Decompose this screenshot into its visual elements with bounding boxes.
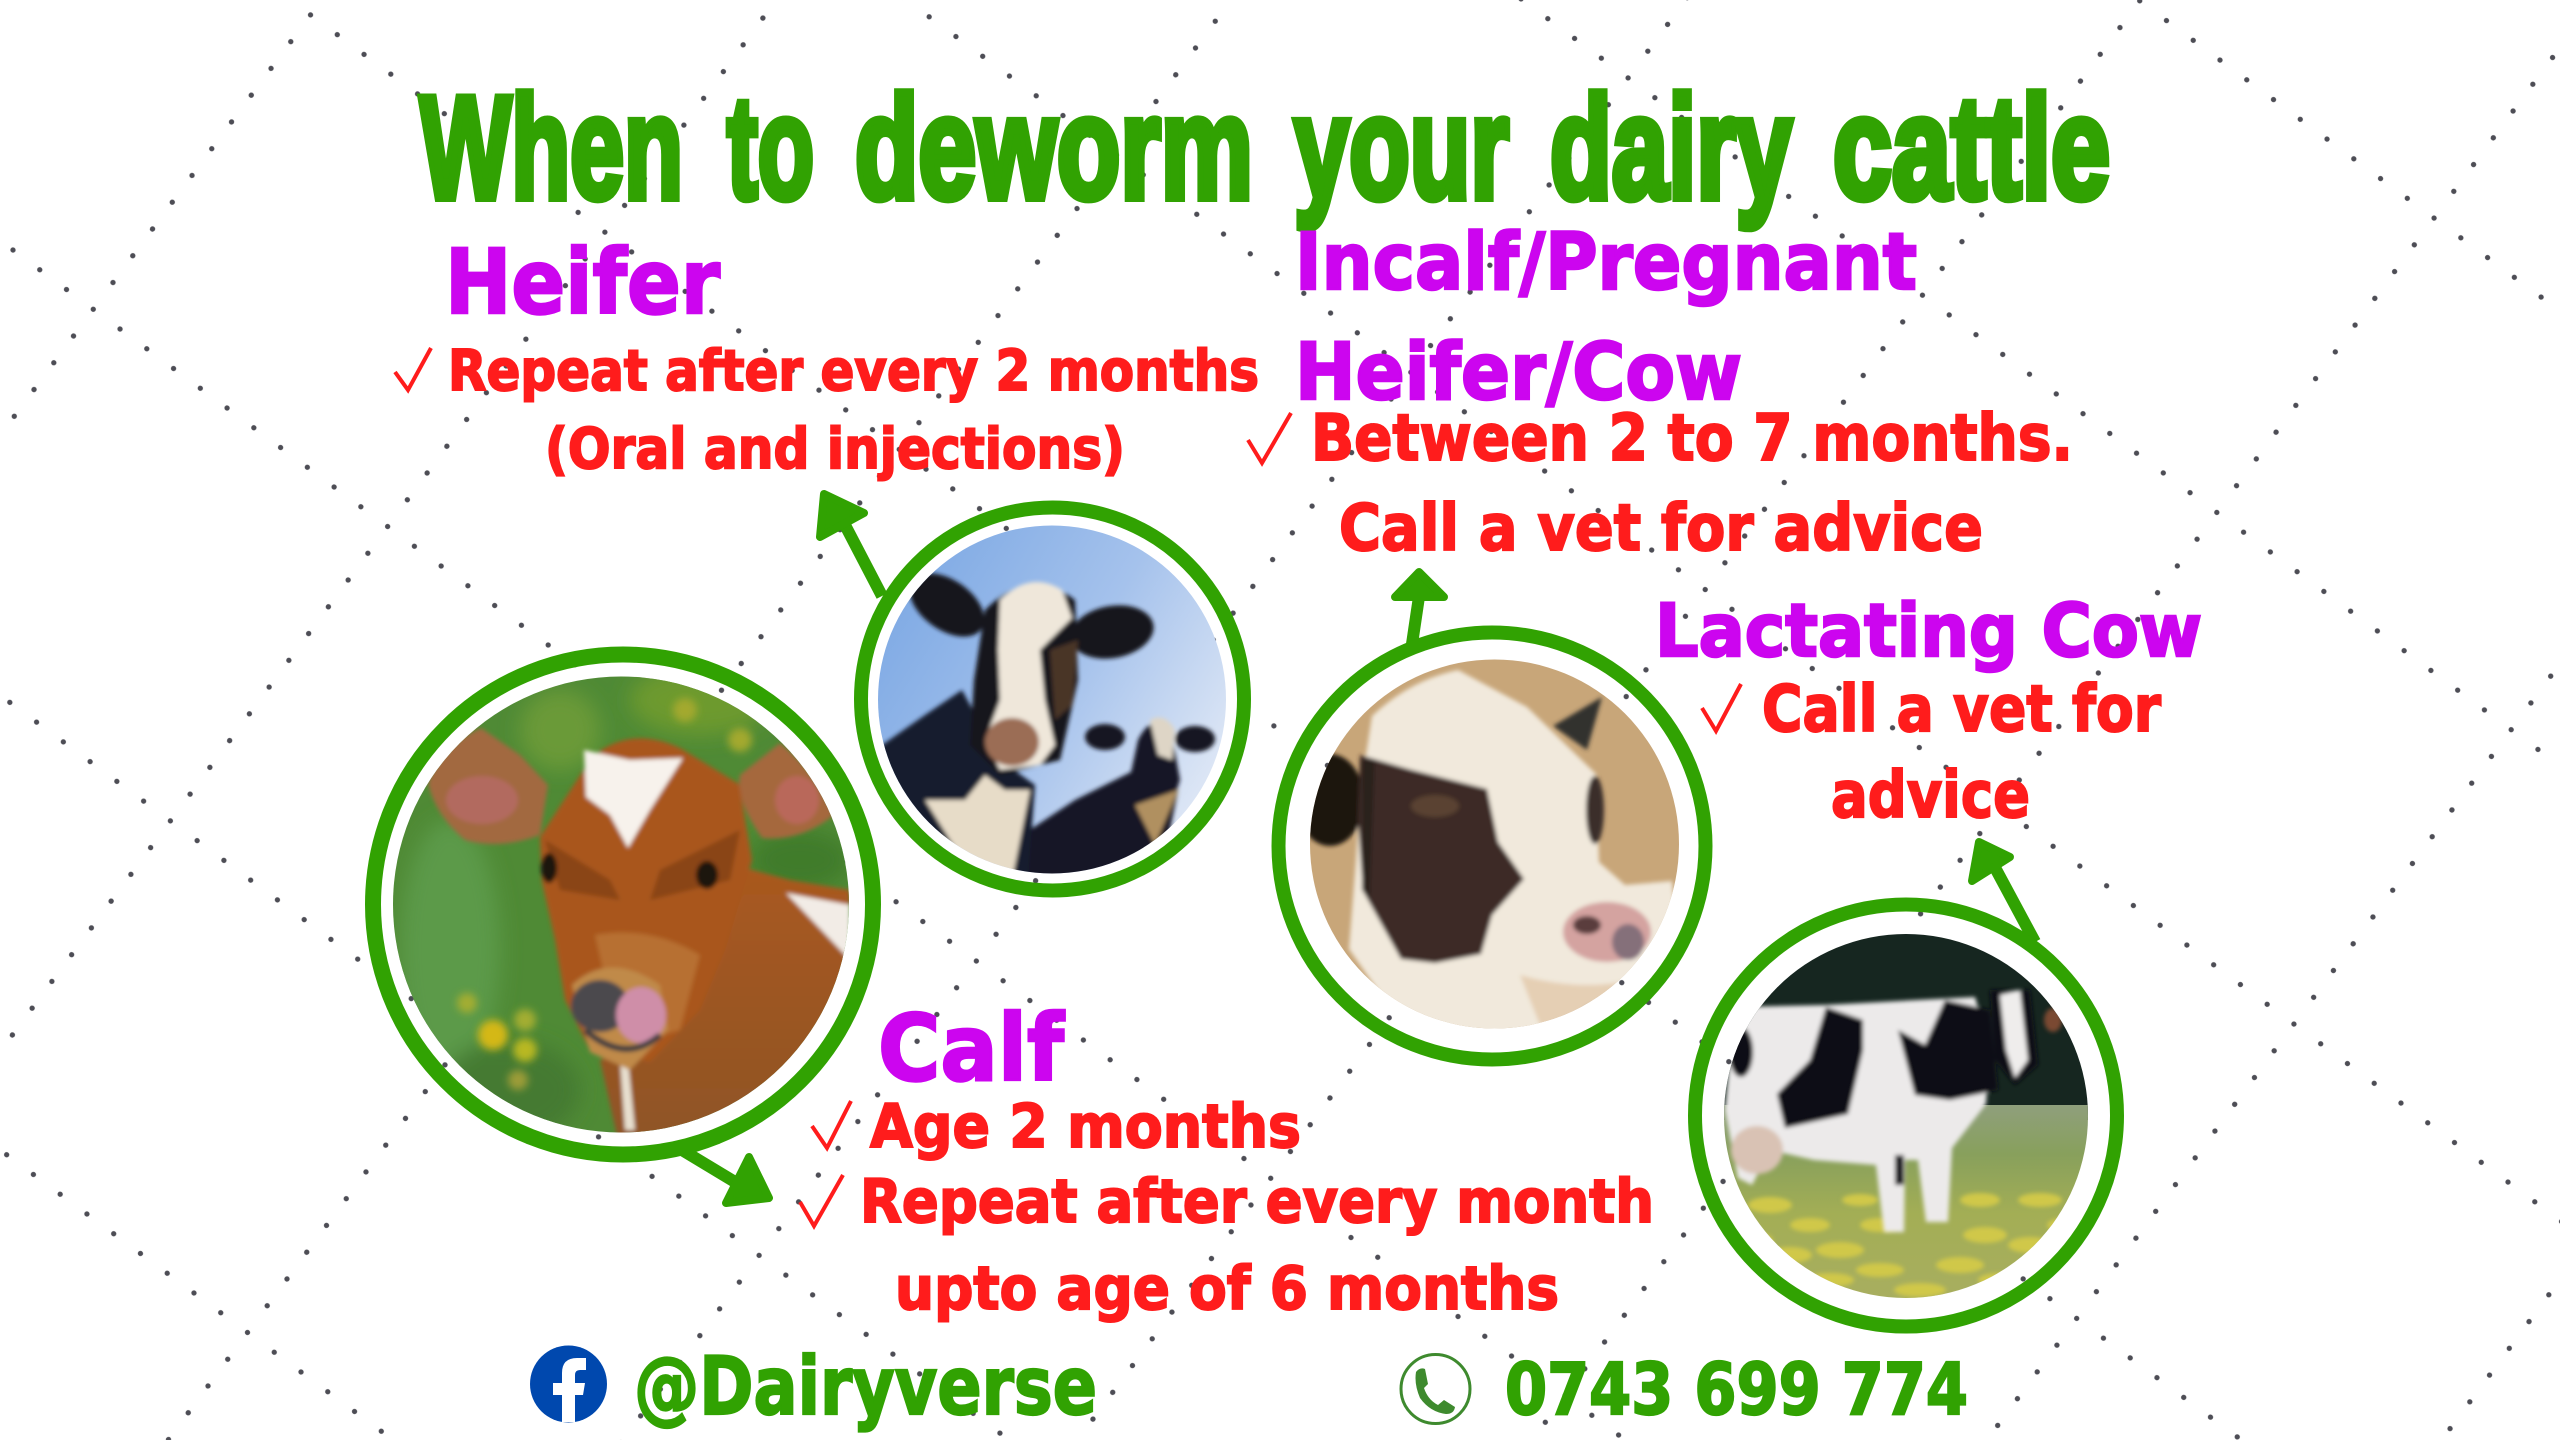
title: [420, 66, 2110, 229]
title: to: [727, 66, 814, 229]
heading: Heifer: Heifer: [445, 230, 720, 334]
head: [970, 585, 1078, 775]
text: call a vet for advice: Call a vet for advice: [1339, 492, 1983, 566]
icon: check mark: [1248, 413, 1291, 463]
text: upto age of 6 months: upto age of 6 months: [895, 1254, 1559, 1324]
arrow: lactating cow: [1972, 842, 2035, 942]
panel: lactating cow text: [1655, 589, 2202, 833]
text: between 2 to 7 months: Between 2 to 7 months.: [1311, 402, 2073, 476]
arrow: incalf: [1395, 572, 1444, 644]
text: repeat after every 2 months: Repeat after every 2 months: [448, 339, 1259, 404]
text: oral and injections: (Oral and injections): [545, 417, 1125, 482]
eyes: [696, 861, 718, 889]
icon: phone: [1401, 1354, 1470, 1424]
text: phone number: 0743 699 774: [1505, 1348, 1968, 1431]
icon: facebook: [530, 1346, 607, 1422]
ring: calf: [373, 654, 873, 1154]
ears: [908, 570, 988, 640]
panel: calf text: [800, 995, 1654, 1324]
title: dairy: [1550, 66, 1792, 229]
icon: check mark: [395, 348, 431, 390]
panel: heifer text: [395, 230, 1259, 482]
ring: heifer: [861, 508, 1244, 890]
icon: check mark: [1702, 684, 1741, 731]
title: deworm: [855, 66, 1253, 229]
heading: Calf: Calf: [878, 995, 1065, 1102]
photo: pregnant cow: [1310, 660, 1679, 1028]
muzzle: [572, 968, 668, 1070]
text: call a vet for: Call a vet for: [1762, 673, 2161, 747]
arrow: heifer: [820, 494, 882, 596]
footer: facebook handle: [530, 1340, 1097, 1433]
heading: Incalf/Pregnant: Incalf/Pregnant: [1295, 218, 1917, 308]
text: advice: advice: [1831, 759, 2030, 833]
heading: Lactating Cow: Lactating Cow: [1655, 589, 2202, 674]
footer: phone: [1401, 1348, 1968, 1431]
text: @Dairyverse: @Dairyverse: [634, 1340, 1097, 1433]
title: cattle: [1833, 66, 2110, 229]
first cow body: [875, 690, 1035, 880]
ring: pregnant cow: [1278, 632, 1706, 1060]
body: [600, 868, 850, 1140]
photo: heifer: [870, 520, 1230, 880]
icon: check mark: [812, 1101, 851, 1148]
ears: [428, 728, 548, 844]
panel: incalf text: [1248, 218, 2073, 566]
heading: Heifer/Cow: Heifer/Cow: [1295, 328, 1742, 418]
second cow: [1025, 770, 1180, 874]
head: [540, 738, 752, 1062]
text: age 2 months: Age 2 months: [870, 1092, 1301, 1162]
title: your: [1294, 66, 1509, 229]
ring: lactating cow: [1695, 904, 2117, 1326]
photo: lactating cow: [1720, 930, 2092, 1303]
text: repeat after every month: Repeat after every month: [860, 1167, 1654, 1237]
arrow: calf: [682, 1150, 769, 1203]
icon: check mark: [800, 1175, 843, 1226]
title: When: [420, 66, 683, 229]
photo: calf: [393, 676, 849, 1132]
